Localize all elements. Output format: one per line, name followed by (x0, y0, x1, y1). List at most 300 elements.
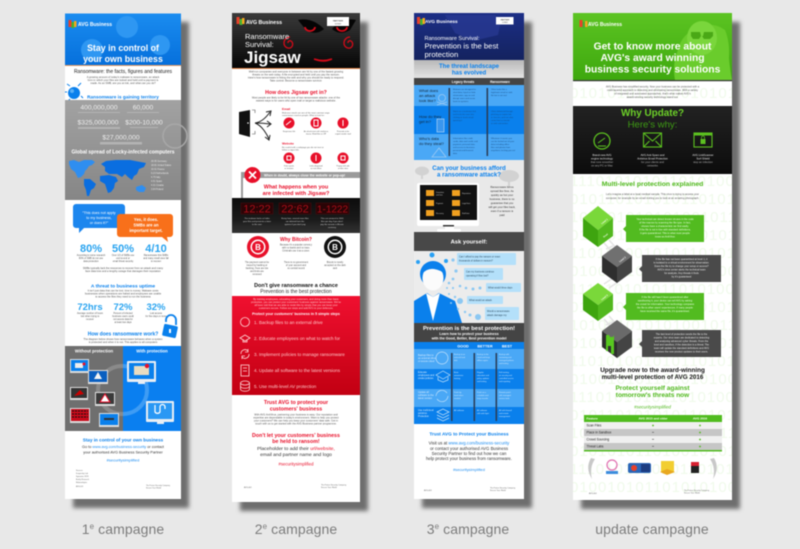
stats row one: 80% (80, 243, 102, 255)
callout: level 4: level and sandbox, if the detection is a threat. The (654, 344, 710, 346)
icon: dark cube level 4 (602, 320, 632, 358)
panel: questions and person: What would an attack (469, 299, 493, 302)
footer notes (76, 470, 170, 490)
trust paragraph: expertise are dependable in today's environment. Want to help you protect (253, 416, 339, 420)
callout: level 1: viruses have a characteristic we find easily. (641, 225, 689, 228)
caption: second campaign: e (263, 522, 268, 531)
panel: questions and person: attack damage my (487, 314, 507, 317)
callout: level 1: it gets quarantined. This is what most people (640, 232, 690, 235)
section: email attack routes: An attachment with malicious (304, 130, 328, 133)
intro text: Take control. Become a ransomware survivor. (270, 78, 323, 82)
footer notes: Secure Your World (490, 489, 506, 492)
table: threats comparison: phishing or exploit kits (491, 113, 511, 116)
heading band: threat landscape: The threat landscape (439, 64, 500, 70)
panel: why update: Brand-new AVG (592, 153, 612, 157)
callout: level 4: The last level of protection sends the file to the (656, 333, 708, 336)
heading: how ransomware works: The diagram below shows how ransomware behaves when a system (83, 337, 163, 341)
background: binary digits: 0101010110100101010101 (570, 85, 774, 102)
table: good better best: Backup with (499, 353, 509, 356)
text: ransomware facts (489, 185, 516, 217)
callout: held to ransom: Placeholder to add their url/website, (257, 446, 335, 452)
panel: why update: Surf-Shield (696, 156, 710, 160)
icon: monitor with ransom prices: Downtime (436, 191, 444, 194)
section: why bitcoin: no central record (287, 267, 305, 270)
legend: country list: 4.75 Italy (151, 176, 161, 179)
callout: level 1: know as AntiVirus (655, 236, 676, 238)
heading: threat to uptime: A threat to business uptime (91, 284, 155, 290)
intro text: multi-layered approach to detecting and eliminating ransomware. With a variety (607, 88, 699, 92)
footer notes: Kaspersky Lab (76, 473, 88, 475)
closing call to action: Go to www.avg.com/business-security or contact (82, 445, 165, 449)
table: good better best: and testing (477, 380, 486, 383)
caption: third campaign: e (435, 522, 440, 531)
panel: questions and person: Can I afford to pay the ransom or reset (459, 256, 500, 258)
legend: country list: 26.95 Germany (151, 160, 168, 163)
table: feature comparison: AVG 2015 and older (638, 416, 668, 420)
intro text: award-winning security technology stand out. (627, 95, 679, 99)
panel: why update: AVG LinkScanner (692, 153, 714, 157)
callout: level 4: and analysing advanced cyber threats. From the (655, 340, 709, 343)
table: threats comparison: legitimate email or web (491, 91, 513, 94)
table: good better best: training (454, 377, 460, 380)
heading: how ransomware works (83, 332, 163, 344)
callout: level 1: Your technical can detect known viruses in the code (636, 218, 694, 221)
section: email attack routes: Email (282, 107, 290, 111)
table: good better best: an external drive (418, 357, 436, 360)
heading band: threat landscape (414, 60, 524, 78)
header: blue banner: Stay in control of (87, 43, 159, 53)
panel: why update: Here's why: (628, 120, 677, 130)
footer notes: Secure Your World (684, 492, 700, 494)
header: jigsaw banner: Ransomware (245, 32, 289, 41)
section: why bitcoin: traced by hashing or (247, 264, 268, 267)
panel: why update (573, 106, 732, 174)
table: good better best: on security and (499, 374, 512, 377)
table: threats comparison: disrupt users and cause (453, 97, 476, 100)
table: threats comparison: Malware are designed to (453, 88, 477, 91)
panel: red steps section: By training employees, educating your customers, and doing more than basic (253, 298, 339, 301)
uptime text and stats: for five days or more (146, 315, 167, 318)
callout: blue speech bubble (73, 204, 125, 233)
table: good better best: Backup files to (418, 354, 434, 357)
table: good better best: and remote (499, 412, 509, 415)
table: feature comparison: Threat Labs (586, 444, 604, 448)
header: navy banner: AVG Business (425, 19, 458, 25)
heading: multi-level protection: Multi-level protection explained (602, 181, 703, 188)
header: blue banner: your own business (83, 54, 163, 64)
callout: level 1: of the macros by scanning the file type. In fact, (639, 222, 691, 224)
legend: country list: 10.61 France (151, 168, 165, 171)
header: jigsaw banner: LOGO (335, 24, 341, 26)
table: threats comparison: come from a remote (491, 119, 510, 122)
icon: dark cube level 2 (602, 245, 632, 283)
panel: black countdown band: The malware locks or hides (244, 217, 270, 220)
stats row one: face data loss and a lengthy outage that damages their reputation (85, 269, 161, 273)
table: good better best: with web layer (477, 412, 489, 415)
panel: red steps section: all been told that we are able to resist this by simply that you can keep your (254, 304, 338, 307)
warning bar with cross icon (241, 167, 360, 198)
stats row one: 4/10 (145, 243, 167, 255)
trust paragraph: touch with us to get started with the AVG Business partner programme. (255, 422, 337, 426)
panel: why update: on any PC or Mac (591, 164, 613, 168)
section: why bitcoin: Because it's a popular currency (280, 244, 313, 246)
background: binary digits: 1101010010101101010010 (570, 245, 773, 262)
icon: green cube level 3: Level 3 (601, 294, 609, 301)
footer notes: Symantec ISTR (76, 475, 89, 478)
subheading text (252, 96, 341, 102)
uptime text and stats: to access the files they need to run the business (95, 294, 151, 298)
callout: level 3 (623, 293, 704, 320)
drop shadows behind the four infographics (73, 22, 740, 511)
intro text block: made. As an SMB, are you at risk, and what can you do? (90, 81, 156, 85)
table: good better best: AV software (454, 409, 464, 412)
table: good better best: external hard (454, 356, 465, 359)
panel: why update: engine technology (591, 156, 614, 160)
table: threats comparison: get in? (419, 119, 432, 124)
header: green banner: business security solutions (585, 64, 721, 76)
heading: protect yourself: tomorrow's threats now (616, 392, 690, 399)
panel: why update: Antivirus Email Protection (637, 156, 668, 160)
panel: first campaign infographic (65, 14, 187, 499)
table: threats comparison: and access to business (453, 146, 475, 149)
closing call to action: #securitysimplified (453, 467, 485, 472)
background: binary digits: 1110101010110101001010 (570, 281, 772, 298)
heading: how does Jigsaw get in: How does Jigsaw get in? (265, 90, 327, 96)
header: navy banner: Prevention is the best (424, 42, 499, 50)
icon: dark cube level 2: Level 2 (619, 256, 627, 263)
footer notes (244, 484, 346, 489)
background: binary digits: 0101010110100101010101 (570, 443, 774, 460)
icon: monitor with ransom prices: Recovery (436, 213, 444, 215)
header: jigsaw banner: AVG Business (246, 20, 282, 26)
footer notes (589, 489, 709, 495)
callout bubbles (457, 253, 521, 320)
band: ask yourself: Ask yourself: (451, 240, 487, 246)
table: threats comparison: anywhere, locking you out (491, 149, 515, 152)
closing call to action: Visit us at www.avg.com/business-security (429, 440, 510, 446)
panel: with protection: With protection (136, 348, 168, 354)
section: why bitcoin: banking. Fees are low (246, 267, 269, 270)
chart: dotted trails (446, 258, 482, 320)
table: threats comparison: personal and financial (453, 149, 474, 152)
panel: without protection: Without protection (75, 348, 113, 354)
table: good better best: Use multi-level (418, 409, 434, 412)
section: why bitcoin: of your account and (286, 264, 307, 267)
section: email attack routes (282, 107, 351, 136)
icon: green cube level 3 (583, 283, 613, 321)
table: good better best: software to the (418, 394, 434, 397)
stats row one: email threat security (113, 260, 134, 263)
closing call to action: #securitysimplified (107, 458, 139, 462)
table: good better best: policy updates (477, 377, 489, 380)
table: good better best: Backup to the (477, 353, 489, 356)
chart: world map (69, 160, 146, 196)
header: navy banner (414, 13, 524, 60)
table: good better best: controlled access (499, 377, 514, 380)
heading: what happens: are infected with Jigsaw? (263, 191, 330, 197)
table: threats comparison: can be locked out of your (491, 140, 515, 143)
section: why bitcoin: web (333, 268, 338, 270)
table: threats comparison: What does (419, 88, 438, 93)
icon: clouds (415, 166, 519, 187)
section: website attack routes: or fake sites (338, 167, 348, 170)
icon: ransomware spider (65, 83, 83, 102)
legend: country list: 9.23 Netherlands (151, 172, 169, 175)
uptime text and stats: 72hrs (77, 302, 103, 313)
panel: black countdown band: to the user (252, 223, 262, 226)
section: why bitcoin: There is no government (284, 261, 308, 264)
section: why bitcoin (245, 236, 347, 276)
callout: level 2 (639, 255, 721, 282)
stats row one: data protection (83, 260, 99, 263)
table: good better best: Regular (477, 371, 484, 374)
table: good better best: with managed (499, 394, 511, 397)
panel: black countdown band: files per day if you don't (321, 220, 343, 223)
header: green banner (573, 13, 732, 81)
table: good better best: cloud and keep (477, 357, 490, 359)
icon: monitor with ransom prices: and loss (436, 194, 443, 196)
icon: padlock (162, 315, 178, 338)
stats row one: to recover (151, 260, 161, 263)
table: good better best: Protection (418, 415, 429, 418)
panel: red steps section: 4. Update all software to the latest versions (254, 368, 341, 373)
band: prevention heading: with the Good, Better, Best prevention model (431, 336, 506, 340)
footer notes: AVG-002 (244, 486, 252, 489)
footer notes: Secure Your World (321, 486, 337, 489)
callout: level 3: have received the same file, it's quarantined. (640, 310, 690, 313)
panel: questions and person: What would three days (488, 286, 513, 290)
table: threats comparison: Information like credit (453, 137, 473, 140)
band: prevention heading: Prevention is the best protection! (423, 326, 515, 332)
table: threats comparison (414, 78, 524, 160)
intro text block (74, 69, 173, 85)
panel: black countdown band: are deleted from the (286, 220, 305, 223)
text: ransomware facts: will get your files back, (489, 205, 516, 209)
table: good better best: versioning and (499, 356, 511, 359)
callout: held to ransom: be held to ransom! (272, 439, 320, 445)
intro text (248, 70, 344, 82)
legend: country list: 3.94 Poland (151, 189, 164, 191)
panel: questions and person: thousands of dollars in ransom? (459, 260, 494, 262)
table: good better best: schedule and (477, 395, 488, 397)
table: threats comparison: harm to systems (453, 100, 468, 103)
text: ransomware facts: Ransomware forms (490, 185, 514, 189)
panel: black countdown band: pay the ransom in Bitcoin (320, 223, 345, 226)
panel: black countdown band (232, 198, 360, 233)
table: good better best: or secure cloud (418, 360, 435, 363)
header: navy banner: PARTNER (501, 18, 510, 22)
background: binary digits: 0101101010101101010100 (570, 191, 773, 208)
section: why bitcoin: with no banks and no trace. (282, 246, 310, 250)
uptime text and stats: not access data for (113, 318, 133, 321)
panel: black countdown band: 22:62 (281, 204, 309, 216)
section: why bitcoin: Bitcoin is mostly (327, 261, 344, 264)
header: navy banner: protection (424, 50, 458, 59)
table: good better best: Basic (454, 372, 459, 374)
panel: can your business afford (414, 160, 524, 232)
heading: protect yourself: Protect yourself against (615, 385, 690, 392)
table: good better best: employees and (418, 374, 435, 377)
table: threats comparison: files and photos from (491, 146, 511, 149)
panel: red steps section: 5. Use multi-level AV protection (254, 384, 317, 389)
callout: held to ransom (252, 433, 340, 466)
heading: don't give ransomware a chance: Don't give ransomware a chance (254, 283, 338, 289)
text: ransomware facts: paid (499, 213, 505, 217)
section: website attack routes: Fake sports (284, 164, 294, 168)
background: binary digits: 0100101011010101001011 (570, 371, 773, 388)
heading: upgrade now: Upgrade now to the award-winning (600, 367, 705, 374)
intro text: Well-run companies and everyone in between are hit by one of the fastest growing (249, 70, 344, 74)
heading: trust AVG: customers' business (270, 406, 322, 412)
text: ransomware facts: even if a ransom is (491, 209, 514, 213)
intro text: Here's how ransomware is hitting the web and why you should be ready to respond. (248, 76, 344, 80)
table: good better best: service tools (499, 397, 510, 400)
table: good better best: Remote patch (499, 391, 511, 394)
callout: level 4 (639, 330, 721, 357)
panel: grey statistics and map: $325,000,000 (78, 120, 119, 126)
table: good better best: BETTER (477, 344, 493, 348)
table: threats comparison: data including office (491, 143, 510, 146)
callout: level 3: the file to other users' experiences. If many people (637, 306, 693, 310)
section: website attack routes: or streams (285, 167, 294, 170)
subheading text: easiest ways is for users who open mail or target a malicious website. (256, 98, 336, 102)
table: feature comparison: Feature (586, 416, 598, 420)
callout: level 2: AVG's virus center alerts the technical team (657, 268, 706, 272)
intro text block: form in which your files are locked and held until a payment is (88, 78, 159, 82)
icons: row symbols (432, 94, 447, 157)
section: email attack routes: Pretends to be (337, 130, 349, 133)
panel: black countdown band: 12:22 (243, 204, 271, 216)
stats row one: SMBs typically lack the resources to recover from an attack and many (83, 266, 164, 270)
heading: upgrade now (600, 367, 705, 381)
table: good better best: Update all (418, 391, 429, 394)
intro text block: A growing amount of today's malware is ransomware, an attack (87, 75, 160, 79)
header: jigsaw banner (232, 13, 360, 69)
stats row one: Ransomware hits SMBs (144, 254, 169, 257)
table: good better best: keep records (477, 397, 488, 400)
table: threats comparison: and tricks the user into (453, 113, 475, 116)
section: email attack routes: Malicious emails are one of the most common ways (282, 112, 330, 114)
icon: green cube level 1 (583, 206, 613, 247)
subheading text: Let's imagine a label at a local medical sample. This virus is trying to access your (606, 192, 699, 196)
callout: level 2: Does the file try to change your setup or access? (654, 265, 709, 268)
callout: blue speech bubble: to my business, (86, 216, 112, 220)
stats row one (77, 243, 169, 273)
footer notes: The Future Security Company (684, 489, 709, 492)
callout: level 2: for analysis. Any threats it finds (664, 272, 699, 275)
footer notes: Malwarebytes (76, 481, 87, 484)
heading: trust AVG (264, 400, 328, 412)
table: threats comparison: do they steal? (419, 141, 445, 146)
section: why bitcoin: removed (253, 273, 262, 276)
connector ladders (604, 240, 618, 329)
heading: don't give ransomware a chance: Prevention is the best protection (260, 289, 332, 295)
uptime text and stats: Average number of hours (77, 312, 104, 315)
icon: monitor with ransom prices: Payment (436, 202, 444, 205)
section: email attack routes: macro, Word files or ZIP (306, 132, 327, 136)
caption: third campaign: campagne (439, 521, 509, 537)
icon: red face (284, 19, 356, 61)
band: prevention heading: Learn how to protect your business (439, 332, 499, 336)
callout: held to ransom: #securitysimplified (278, 462, 314, 466)
icon: monitor with ransom prices: Legal fees (462, 203, 470, 205)
table: good better best: Patch on a (477, 391, 487, 394)
text: ransomware facts: quickly as hot your (491, 193, 513, 197)
panel: grey statistics and map: 60,000 (133, 104, 154, 112)
header: green banner: AVG's award winning (600, 53, 705, 64)
subheading text (606, 192, 699, 200)
stats row one: and many small ones fail (143, 258, 169, 260)
table: threats comparison: How do they (419, 114, 441, 119)
panel: questions and person: operating if files lost? (466, 274, 489, 278)
background: binary digits: 0100101011010101001011 (570, 263, 773, 280)
table: feature comparison (584, 415, 722, 452)
uptime text and stats: businesses when operations are halted and employees are unable (85, 292, 162, 296)
icon: infected screens (70, 359, 119, 427)
table: feature comparison: Place in Sandbox (586, 430, 612, 434)
uptime text and stats: It isn't just data that can be lost; time is money. Malware costs (88, 288, 159, 292)
table: good better best: needed (454, 398, 460, 400)
trust paragraph: With AVG AntiVirus, partnering your business is easy. Our reputation and (254, 412, 338, 416)
panel: red steps section: 3. Implement policies to manage ransomware (254, 352, 345, 357)
panel: why update: that runs smoother (591, 160, 613, 164)
table: threats comparison: file but is not real (491, 94, 507, 97)
uptime text and stats: recover (86, 318, 94, 321)
table: good better best: GOOD (457, 344, 469, 348)
callout: level 3: the crowd for information. Your technology compares (636, 303, 695, 306)
background: binary digits: 0101101010101101010100 (570, 299, 773, 316)
footer notes: Secure Your World (146, 488, 161, 490)
table: threats comparison: Legacy threats (452, 80, 474, 84)
callout: level 2: by it's guaranteed (672, 276, 692, 278)
callout: level 4: receives the new product updates to their users. (655, 350, 708, 354)
heading: gaining territory: Ransomware is gaining territory (87, 94, 159, 100)
table: threats comparison: Ransomware (490, 80, 510, 84)
legend: country list (151, 160, 172, 191)
uptime text and stats: lost when trying to (81, 315, 100, 318)
table: good better best (414, 342, 524, 424)
heading: how ransomware works: is protected and when it is not. This applies to all computers (89, 340, 158, 344)
section: email attack routes: ransomware reaches people. What to look for: (282, 114, 325, 117)
text: ransomware facts: spread like fires. As (490, 189, 514, 193)
footer notes: AVG-003 (424, 489, 432, 492)
background: binary digits: 0100101011010101001011 (570, 479, 773, 496)
icon: red coin: B (255, 243, 261, 252)
background: binary digits: 1010010101010010110101 (570, 425, 774, 442)
table: threats comparison: Starts as a malicious link (453, 110, 477, 113)
section: website attack routes: Popup with ads (337, 164, 350, 168)
callout: level 1: If the file is not in line with standard definitions, (639, 228, 691, 232)
table: threats comparison: an attack (419, 93, 435, 98)
table: feature comparison: Crowd Sourcing (586, 438, 609, 442)
background: binary digits: 1010110101001010101100 (570, 105, 773, 122)
heading: trust AVG: Trust AVG to protect your (264, 400, 328, 406)
icon: monitor with ransom prices (417, 183, 479, 232)
background: binary digits: 1010010101010010110101 (570, 317, 774, 334)
caption: first campaign: e (90, 522, 95, 531)
section: why bitcoin: and limits are (250, 270, 265, 273)
background: binary digits: 1110101010101101010010 (570, 461, 772, 478)
panel: grey statistics and map: 400,000,000 (80, 104, 118, 112)
text: ransomware facts: business, there is no (490, 197, 515, 201)
callout: blue speech bubble: or does it?" (90, 221, 109, 225)
table: threats comparison: clicking or trusts email (453, 116, 474, 119)
table: threats comparison: Who's data (419, 136, 440, 141)
panel: can your business afford: Can your business afford (432, 165, 506, 172)
icons: table row symbols (436, 352, 450, 421)
closing call to action: Stay in control of your own business (83, 438, 164, 442)
callout: level 2: If the file has not been quarantined at level 1, it (656, 258, 708, 261)
